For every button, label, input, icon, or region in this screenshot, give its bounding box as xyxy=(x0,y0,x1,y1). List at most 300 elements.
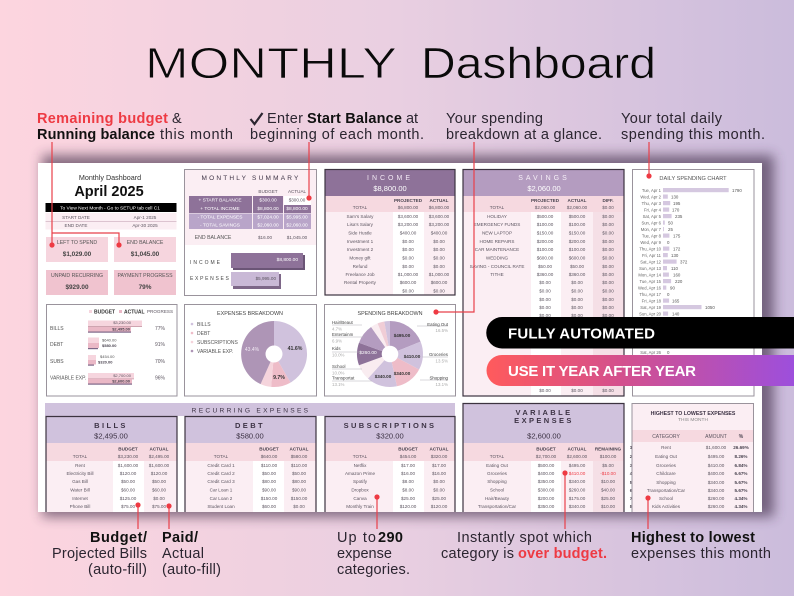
summary table: + TOTAL INCOME xyxy=(200,206,240,212)
income rows xyxy=(344,214,450,294)
daily labels: Sun, Apr 20 xyxy=(639,312,662,316)
variable rows: $10.00 xyxy=(601,504,615,509)
stat: unpaid recurring: $929.00 xyxy=(65,284,89,291)
daily labels: Sun, Apr 6 xyxy=(641,220,662,226)
ranked rows: Shopping xyxy=(656,480,676,485)
income rows: $0.00 xyxy=(433,239,445,244)
income rows: $3,600.00 xyxy=(398,214,419,219)
variable header: EXPENSES xyxy=(514,416,574,425)
heading: Monthly Dashboard xyxy=(79,173,141,182)
pie chart: 9.7% xyxy=(273,375,285,381)
income totals: TOTAL xyxy=(353,205,368,210)
panel: bills xyxy=(46,416,177,512)
daily labels: 172 xyxy=(673,246,681,252)
savings rows xyxy=(470,214,614,393)
variable rows: $495.00 xyxy=(569,463,586,468)
variable header: $2,600.00 xyxy=(527,432,561,440)
savings rows: $0.00 xyxy=(602,272,614,277)
panel: expenses breakdown: EXPENSES BREAKDOWN xyxy=(217,311,283,317)
savings rows: $0.00 xyxy=(602,214,614,219)
summary table: $2,060.00 xyxy=(286,222,308,228)
annotation: spending breakdown: Your spending xyxy=(446,111,543,127)
subscriptions rows: Amazon Prime xyxy=(345,471,376,476)
bills totals: TOTAL xyxy=(73,454,88,459)
variable rows: $200.00 xyxy=(538,496,555,501)
savings rows: HOME REPAIRS xyxy=(480,239,514,244)
income rows: Freelance Job xyxy=(345,272,375,277)
ranked rows: Kids Activities xyxy=(652,504,681,509)
daily labels: Fri, Apr 11 xyxy=(642,253,662,258)
debt totals: ACTUAL xyxy=(290,446,309,452)
ranked rows: 4.34% xyxy=(734,504,748,509)
savings rows: $100.00 xyxy=(569,222,586,227)
pie labels xyxy=(332,320,449,387)
panel: debt xyxy=(185,416,316,512)
savings rows: HOLIDAY xyxy=(487,214,507,219)
daily labels: Sun, Apr 13 xyxy=(639,266,662,271)
daily labels: Fri, Apr 18 xyxy=(642,298,662,304)
income rows: Money gift xyxy=(349,256,371,260)
bills rows: Phone Bill xyxy=(70,504,90,509)
daily labels: 220 xyxy=(675,279,683,284)
daily labels: 50 xyxy=(668,220,673,226)
pie chart: $495.00 xyxy=(394,333,411,338)
annotation: over budget: Instantly spot which xyxy=(457,530,592,546)
heading xyxy=(651,411,736,423)
variable row: VARIABLE EXP. xyxy=(50,376,86,382)
pie labels: Entertainm xyxy=(332,332,354,337)
savings rows: $360.00 xyxy=(569,272,586,277)
savings rows: $360.00 xyxy=(537,272,554,277)
annotation: total daily spending: spending this month. xyxy=(621,127,765,143)
annotation: up to 290: Up to xyxy=(337,530,376,546)
income rows: $0.00 xyxy=(402,264,414,269)
bills rows: $60.00 xyxy=(152,488,166,492)
subscriptions rows: Netflix xyxy=(354,463,367,468)
subscriptions rows: Monthly Train xyxy=(346,504,374,509)
income rows: $400.00 xyxy=(400,230,417,236)
summary table: $300.00 xyxy=(259,198,277,204)
income totals: PROJECTED xyxy=(394,198,423,203)
panel: monthly summary: ACTUAL xyxy=(288,189,307,194)
subscriptions totals: BUDGET xyxy=(398,446,418,452)
savings rows: $0.00 xyxy=(571,388,583,393)
savings rows: $200.00 xyxy=(569,239,586,244)
bills row: 77% xyxy=(155,326,166,332)
pie labels: 13.1% xyxy=(436,382,448,387)
ranked rows: $260.00 xyxy=(708,496,725,501)
annotation: remaining budget: Remaining budget xyxy=(37,111,168,127)
income rows: $0.00 xyxy=(402,288,414,294)
legend: VARIABLE EXP. xyxy=(197,349,233,355)
daily labels: Thu, Apr 10 xyxy=(639,246,662,252)
variable header: VARIABLE xyxy=(516,408,572,417)
bills totals xyxy=(46,443,177,461)
subs row: $454.00 xyxy=(100,354,115,359)
subs row: $320.00 xyxy=(98,360,113,364)
bills rows: $1,600.00 xyxy=(149,463,170,468)
variable header xyxy=(463,404,624,443)
variable rows: Groceries xyxy=(487,471,508,476)
annotation: highest to lowest: expenses this month xyxy=(631,546,771,562)
savings header xyxy=(463,170,624,196)
debt header xyxy=(185,417,316,443)
pie labels: Kids xyxy=(332,346,341,351)
income rows: $1,000.00 xyxy=(429,272,450,277)
ranked rows: 8.26% xyxy=(734,454,748,459)
savings rows: $500.00 xyxy=(569,214,586,219)
daily labels: 165 xyxy=(672,298,680,304)
annotation: spending breakdown xyxy=(446,111,602,143)
savings totals: ACTUAL xyxy=(568,198,587,203)
income totals: $6,800.00 xyxy=(398,205,419,210)
savings totals xyxy=(463,196,624,212)
savings rows: $600.00 xyxy=(569,256,586,260)
savings rows: $0.00 xyxy=(602,230,614,236)
banner: fully automated xyxy=(486,317,794,348)
variable rows: $260.00 xyxy=(569,488,586,492)
ranked rows: Eating Out xyxy=(655,454,678,459)
savings rows: $0.00 xyxy=(539,305,551,310)
arrow: daily spending callout xyxy=(646,142,652,179)
stat: payment progress: PAYMENT PROGRESS xyxy=(117,273,173,279)
savings rows: $0.00 xyxy=(602,239,614,244)
savings rows: $0.00 xyxy=(571,288,583,294)
income rows: $3,200.00 xyxy=(429,222,450,227)
bills rows: $120.00 xyxy=(120,471,137,476)
debt row xyxy=(50,338,166,349)
debt rows: Credit Card 2 xyxy=(207,471,235,476)
variable rows: $350.00 xyxy=(538,479,555,484)
panel: highest to lowest expenses xyxy=(630,404,754,512)
stat: unpaid recurring xyxy=(46,270,108,295)
variable totals: $2,700.00 xyxy=(536,454,557,459)
ranked rows: 7 xyxy=(630,496,633,501)
savings rows: $0.00 xyxy=(571,313,583,318)
variable rows: $500.00 xyxy=(538,463,555,468)
savings rows: $0.00 xyxy=(571,297,583,302)
pie chart: 41.6% xyxy=(288,346,303,352)
subscriptions rows: $0.00 xyxy=(433,488,445,492)
variable row: $2,600.00 xyxy=(112,378,131,384)
savings rows: $0.00 xyxy=(602,256,614,260)
income rows: $0.00 xyxy=(402,239,414,244)
income rows: $600.00 xyxy=(400,280,417,285)
variable rows: $25.00 xyxy=(601,496,615,501)
bills totals: $3,230.00 xyxy=(118,454,139,459)
income totals xyxy=(325,196,455,212)
debt rows: $50.00 xyxy=(262,471,276,476)
subs row: 70% xyxy=(155,359,166,365)
daily labels: 175 xyxy=(673,234,681,238)
heading: HIGHEST TO LOWEST EXPENSES xyxy=(651,411,736,417)
pie labels: 6.9% xyxy=(332,338,342,344)
ranked rows xyxy=(630,445,749,509)
bills totals: BUDGET xyxy=(118,446,138,452)
savings rows: EMERGENCY FUNDS xyxy=(474,222,520,227)
legend: ACTUAL xyxy=(124,310,145,316)
pie labels: 10.0% xyxy=(332,370,345,376)
savings rows: SAVING - COUNCIL RATE xyxy=(470,264,524,269)
income bar: $8,800.00 xyxy=(277,257,298,263)
income rows: $3,600.00 xyxy=(429,214,450,219)
ranked rows: $410.00 xyxy=(708,463,725,468)
debt rows: $110.00 xyxy=(261,463,278,468)
savings rows: $0.00 xyxy=(571,305,583,310)
savings rows: $200.00 xyxy=(537,239,554,244)
arrow: budget callout xyxy=(135,502,141,529)
variable totals xyxy=(463,443,624,461)
stat: payment progress xyxy=(114,270,176,295)
column headers: CATEGORY xyxy=(652,434,680,440)
bills header xyxy=(46,417,177,443)
income rows: $0.00 xyxy=(433,288,445,294)
variable rows: $300.00 xyxy=(538,488,555,492)
debt rows: $80.00 xyxy=(262,479,276,484)
debt totals: $640.00 xyxy=(261,454,278,459)
daily labels: 235 xyxy=(675,214,683,219)
income rows: Rental Property xyxy=(344,280,377,285)
column headers xyxy=(632,430,753,442)
savings rows: $50.00 xyxy=(538,264,552,269)
daily labels: Thu, Apr 17 xyxy=(639,292,662,297)
ranked rows: $400.00 xyxy=(708,471,725,476)
panel: daily spending chart: DAILY SPENDING CHART xyxy=(659,176,727,182)
savings rows: $0.00 xyxy=(602,305,614,310)
variable row xyxy=(50,373,166,385)
ranked rows: Groceries xyxy=(656,463,677,468)
daily labels: 25 xyxy=(668,227,673,232)
stat: left to spend: LEFT TO SPEND xyxy=(57,240,97,246)
legend: SUBSCRIPTIONS xyxy=(197,340,239,346)
savings rows: $0.00 xyxy=(602,388,614,393)
income rows: $3,200.00 xyxy=(398,222,419,227)
income rows: Side Hustle xyxy=(348,230,372,236)
date rows: END DATE xyxy=(65,223,87,228)
ranked rows: 5 xyxy=(630,480,633,485)
column headers: % xyxy=(739,434,744,440)
date rows: START DATE xyxy=(62,215,90,220)
variable rows: -$10.00 xyxy=(600,471,616,476)
bills rows: $75.00 xyxy=(121,504,135,509)
annotation: budget projected bills: (auto-fill) xyxy=(88,562,147,578)
ranked rows: Rent xyxy=(661,445,672,450)
subscriptions header xyxy=(325,417,455,443)
summary table: $1,045.00 xyxy=(287,235,308,240)
income bar xyxy=(190,253,305,270)
ranked rows: Childcare xyxy=(656,471,676,476)
panel: savings xyxy=(463,170,624,396)
variable rows: $40.00 xyxy=(601,488,615,492)
pie labels: Eating Out xyxy=(427,322,449,327)
summary table: $7,024.00 xyxy=(257,214,279,220)
savings rows: $50.00 xyxy=(570,264,584,269)
subscriptions rows: $25.00 xyxy=(432,496,446,501)
subscriptions rows: $8.00 xyxy=(402,488,414,492)
variable rows: Shopping xyxy=(487,479,507,484)
savings rows: $0.00 xyxy=(539,388,551,393)
recurring expenses band xyxy=(45,403,455,416)
daily labels: 0 xyxy=(667,240,670,245)
daily labels: Mon, Apr 14 xyxy=(638,272,662,278)
panel: spending breakdown: SPENDING BREAKDOWN xyxy=(358,311,423,317)
daily labels: Sat, Apr 19 xyxy=(640,305,662,310)
expenses bar: $5,995.00 xyxy=(256,276,276,281)
bills totals: $2,495.00 xyxy=(149,454,170,459)
annotation: total daily spending xyxy=(621,111,765,143)
summary table: - TOTAL EXPENSES xyxy=(198,214,242,220)
subscriptions rows: $16.00 xyxy=(432,471,446,476)
income totals: $6,800.00 xyxy=(429,205,450,210)
stat: payment progress: 79% xyxy=(139,284,152,291)
subscriptions rows: $120.00 xyxy=(431,504,448,509)
ranked rows: 4.34% xyxy=(734,496,748,501)
summary table: $2,060.00 xyxy=(257,222,279,228)
daily labels: 195 xyxy=(673,201,681,206)
legend: DEBT xyxy=(197,331,210,337)
income rows: $0.00 xyxy=(433,247,445,252)
annotation: budget projected bills: Projected Bills xyxy=(52,546,147,562)
savings rows: $0.00 xyxy=(602,264,614,269)
debt rows: $60.00 xyxy=(262,504,276,509)
annotation: over budget: category is xyxy=(441,546,514,562)
bills rows: $50.00 xyxy=(152,479,166,484)
annotation: remaining budget: & xyxy=(172,111,182,127)
bills rows xyxy=(66,463,170,509)
bills rows: $75.00 xyxy=(152,504,166,509)
subscriptions totals xyxy=(325,443,455,461)
daily labels: Sat, Apr 12 xyxy=(640,260,662,264)
savings rows: $0.00 xyxy=(539,280,551,285)
bills rows: $120.00 xyxy=(151,471,168,476)
ranked rows: $340.00 xyxy=(708,480,725,485)
daily labels: Wed, Apr 9 xyxy=(640,240,662,245)
panel: monthly summary: MONTHLY SUMMARY xyxy=(201,175,301,182)
income rows: $1,000.00 xyxy=(398,272,419,277)
bills totals: ACTUAL xyxy=(150,446,169,452)
bills row: BILLS xyxy=(50,326,64,332)
savings rows: WEDDING xyxy=(486,256,509,260)
variable row: $2,700.00 xyxy=(113,373,132,378)
heading: THIS MONTH xyxy=(678,417,708,423)
subscriptions rows: $8.00 xyxy=(402,479,414,484)
savings rows: $0.00 xyxy=(602,222,614,227)
debt totals: BUDGET xyxy=(259,446,279,452)
savings rows: $600.00 xyxy=(537,256,554,260)
ranked rows: 1 xyxy=(630,445,633,450)
variable totals: ACTUAL xyxy=(568,446,587,452)
bills rows: $125.00 xyxy=(120,496,137,501)
pie labels: 16.5% xyxy=(436,328,448,333)
annotation: total daily spending: Your total daily xyxy=(621,111,723,127)
income rows: $600.00 xyxy=(431,280,448,285)
variable totals: BUDGET xyxy=(536,446,556,452)
income header: INCOME xyxy=(367,175,413,182)
pie labels: Groceries xyxy=(429,352,449,357)
summary table: $16.00 xyxy=(258,235,272,240)
pie chart: $340.00 xyxy=(394,371,411,376)
annotation: up to 290: categories. xyxy=(337,562,410,578)
debt row: $580.00 xyxy=(102,343,117,348)
variable rows: $5.00 xyxy=(602,463,614,468)
savings rows: $100.00 xyxy=(569,247,586,252)
debt rows: Car Loan 1 xyxy=(210,488,233,492)
income rows: Refund xyxy=(353,264,368,269)
annotation: over budget xyxy=(441,530,607,562)
arrow: start balance callout xyxy=(306,142,312,201)
annotation: enter start balance: Enter xyxy=(267,111,303,127)
expenses bar xyxy=(190,272,281,289)
pie chart xyxy=(357,321,423,387)
expenses bar: EXPENSES xyxy=(190,276,231,282)
panel: expenses breakdown xyxy=(184,304,316,396)
pie labels: Transportat xyxy=(332,376,355,380)
subscriptions rows: Canva xyxy=(353,496,367,501)
subscriptions totals: $454.00 xyxy=(400,454,417,459)
arrow: remaining budget callout xyxy=(49,142,122,248)
savings rows: $0.00 xyxy=(602,247,614,252)
savings rows: $0.00 xyxy=(602,288,614,294)
arrow: over budget callout xyxy=(562,470,568,529)
ranked rows: 26.69% xyxy=(733,445,749,450)
debt rows: Car Loan 2 xyxy=(210,496,233,501)
income rows: $400.00 xyxy=(431,230,448,236)
variable totals: TOTAL xyxy=(490,454,505,459)
subs row xyxy=(50,354,166,366)
legend xyxy=(89,309,173,316)
summary table: END BALANCE xyxy=(195,235,232,241)
pie labels: School xyxy=(332,364,345,369)
daily labels: Tue, Apr 1 xyxy=(642,188,662,193)
savings totals: $2,060.00 xyxy=(535,205,556,210)
daily labels: Wed, Apr 16 xyxy=(638,286,662,290)
date rows xyxy=(46,213,176,230)
savings rows: $100.00 xyxy=(537,222,554,227)
daily labels: Sat, Apr 26 xyxy=(640,350,662,355)
pie labels: 10.0% xyxy=(332,352,345,358)
income rows: $0.00 xyxy=(402,256,414,260)
savings rows: NEW LAPTOP xyxy=(482,230,512,236)
annotation: enter start balance xyxy=(250,111,424,143)
subscriptions totals: $320.00 xyxy=(431,454,448,459)
banner: fully automated: FULLY AUTOMATED xyxy=(508,326,655,342)
debt row: DEBT xyxy=(50,342,63,348)
annotation: budget projected bills: Budget/ xyxy=(90,530,147,546)
subscriptions rows: $17.00 xyxy=(401,463,415,468)
debt rows: $150.00 xyxy=(261,496,278,501)
stat: end balance xyxy=(114,237,176,262)
variable rows: Transportation/Car xyxy=(478,504,517,509)
legend: BILLS xyxy=(197,322,211,328)
debt rows: Student Loan xyxy=(207,504,235,509)
daily labels: Tue, Apr 15 xyxy=(640,279,662,284)
summary table: $8,800.00 xyxy=(286,206,308,212)
debt rows: Credit Card 3 xyxy=(207,479,235,484)
variable rows: School xyxy=(490,488,504,492)
pie labels: Shopping xyxy=(429,376,449,380)
daily labels: 372 xyxy=(680,260,688,264)
savings totals: PROJECTED xyxy=(531,198,560,203)
subscriptions header: SUBSCRIPTIONS xyxy=(344,421,436,430)
summary table: $5,995.00 xyxy=(286,214,308,220)
panel: spending breakdown xyxy=(324,304,456,396)
bills row: $3,230.00 xyxy=(113,320,132,325)
title xyxy=(145,39,656,88)
ranked rows: School xyxy=(659,496,673,501)
subscriptions rows: $120.00 xyxy=(400,504,417,509)
annotation: enter start balance: Start Balance xyxy=(307,111,402,127)
legend: BUDGET xyxy=(94,310,115,316)
